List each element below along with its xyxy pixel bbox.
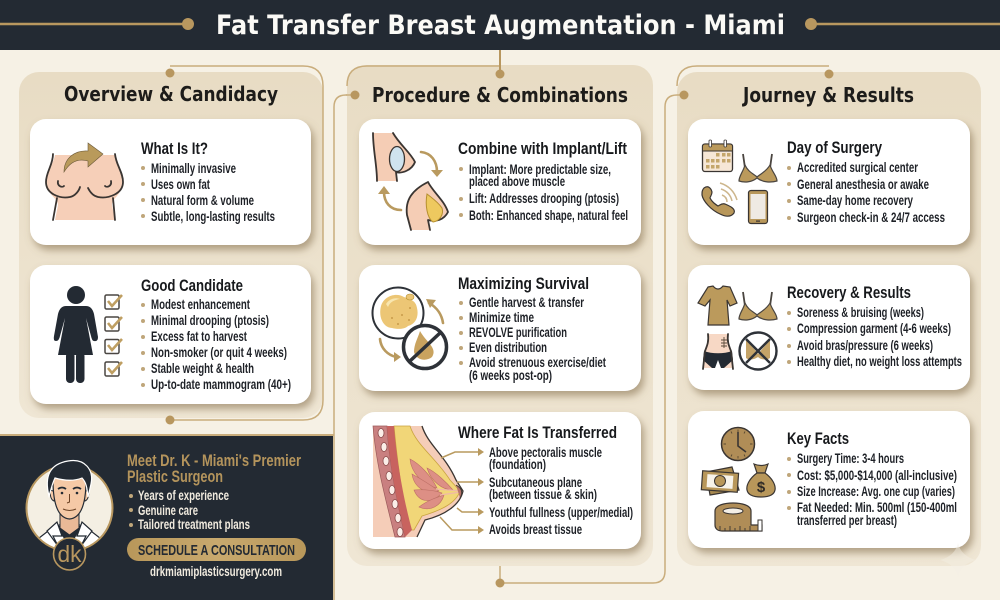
title: Fat Transfer Breast Augmentation - Miami: [216, 10, 785, 41]
website url: drkmiamiplasticsurgery.com: [150, 564, 282, 579]
text: recovery and results: Avoid bras/pressure (6 weeks): [797, 338, 933, 353]
panel: meet Dr. K: [0, 434, 334, 600]
text: combine with implant or lift: Implant: More predictable size,: [469, 162, 611, 177]
text: good candidate: Non-smoker (or quit 4 weeks): [151, 345, 287, 360]
text: good candidate: Up-to-date mammogram (40+): [151, 377, 291, 392]
icon: breast anatomy cross-section: [373, 426, 484, 537]
icon: calendar, bra, phone and mobile: [702, 140, 777, 224]
button: schedule a consultation: [127, 538, 306, 561]
text: maximizing survival: Maximizing Survival: [458, 274, 589, 293]
text: good candidate: Stable weight & health: [151, 361, 254, 376]
portrait: Dr. K: dk: [58, 541, 82, 567]
list: surgeon benefits: Genuine care: [138, 503, 198, 518]
text: what is it: Uses own fat: [151, 177, 210, 192]
card: what is it: [30, 119, 311, 245]
text: what is it: [141, 139, 275, 224]
text: combine with implant or lift: Combine with Implant/Lift: [458, 139, 627, 158]
heading: journey and results: Journey & Results: [741, 83, 914, 107]
text: maximizing survival: (6 weeks post-op): [469, 368, 552, 383]
text: day of surgery: Same-day home recovery: [797, 193, 913, 208]
heading: overview and candidacy: Overview & Candidacy: [64, 82, 278, 106]
icon: fat cell and prohibited drop: [372, 288, 446, 368]
text: key facts: transferred per breast): [797, 513, 897, 528]
icon: woman with checklist: [54, 286, 122, 383]
text: day of surgery: Accredited surgical center: [797, 160, 919, 175]
text: maximizing survival: REVOLVE purification: [469, 325, 567, 340]
text: good candidate: Minimal drooping (ptosis): [151, 313, 269, 328]
text: maximizing survival: Gentle harvest & transfer: [469, 295, 585, 310]
panel: overview and candidacy: [19, 66, 323, 424]
text: good candidate: Excess fat to harvest: [151, 329, 247, 344]
text: day of surgery: General anesthesia or awake: [797, 177, 929, 192]
card: maximizing survival: [359, 265, 641, 391]
card: combine with implant or lift: [359, 119, 641, 245]
text: where fat is transferred: Where Fat Is Transferred: [458, 423, 617, 442]
text: maximizing survival: Even distribution: [469, 340, 547, 355]
list: surgeon benefits: [129, 488, 250, 532]
text: recovery and results: Soreness & bruising (weeks): [797, 305, 924, 320]
text: day of surgery: [787, 138, 945, 225]
text: maximizing survival: [458, 274, 606, 383]
text: where fat is transferred: Youthful fullness (upper/medial): [489, 505, 633, 520]
connector lines: [334, 50, 684, 600]
text: combine with implant or lift: Both: Enhanced shape, natural feel: [469, 208, 628, 223]
text: where fat is transferred: (foundation): [489, 457, 546, 472]
icon: implant and lift profiles: [373, 133, 448, 230]
text: combine with implant or lift: placed above muscle: [469, 174, 565, 189]
text: maximizing survival: Avoid strenuous exercise/diet: [469, 355, 606, 370]
card: recovery and results: [688, 265, 970, 390]
panel: procedure and combinations: [346, 50, 653, 566]
header banner: [0, 0, 1000, 50]
card: good candidate: [30, 265, 311, 404]
text: good candidate: Modest enhancement: [151, 297, 250, 312]
text: day of surgery: Day of Surgery: [787, 138, 882, 157]
list: surgeon benefits: Years of experience: [138, 488, 229, 503]
text: good candidate: [141, 276, 291, 392]
text: recovery and results: Recovery & Results: [787, 283, 911, 302]
icon: garments, abdomen and no-bra sign: [698, 286, 777, 370]
text: what is it: Natural form & volume: [151, 193, 254, 208]
text: what is it: What Is It?: [141, 139, 208, 158]
text: day of surgery: Surgeon check-in & 24/7 access: [797, 210, 945, 225]
text: where fat is transferred: [458, 423, 633, 537]
icon: sparkle watermark: [940, 543, 976, 577]
icon: clock, money and measuring tape: $: [757, 479, 766, 496]
text: what is it: Minimally invasive: [151, 161, 236, 176]
card: key facts: [688, 411, 970, 548]
button: schedule a consultation: SCHEDULE A CONSULTATION: [138, 542, 295, 559]
text: maximizing survival: Minimize time: [469, 310, 534, 325]
text: surgeon heading: Meet Dr. K - Miami's Premier: [127, 452, 301, 470]
text: combine with implant or lift: [458, 139, 628, 223]
list: surgeon benefits: Tailored treatment plans: [138, 517, 250, 532]
portrait: Dr. K: [26, 461, 112, 570]
card: where fat is transferred: [359, 412, 641, 549]
text: key facts: Key Facts: [787, 429, 849, 448]
icon: clock, money and measuring tape: [701, 428, 775, 531]
text: combine with implant or lift: Lift: Addresses drooping (ptosis): [469, 191, 619, 206]
icon: breasts with arrow: [46, 143, 123, 220]
text: recovery and results: [787, 283, 962, 369]
text: key facts: Surgery Time: 3-4 hours: [797, 451, 904, 466]
text: where fat is transferred: Subcutaneous plane: [489, 475, 582, 490]
text: key facts: [787, 429, 957, 528]
panel: journey and results: [677, 66, 981, 566]
text: where fat is transferred: Avoids breast tissue: [489, 522, 582, 537]
heading: procedure and combinations: Procedure & Combinations: [372, 83, 628, 107]
text: where fat is transferred: Above pectoralis muscle: [489, 445, 602, 460]
text: good candidate: Good Candidate: [141, 276, 243, 295]
text: surgeon heading: [127, 452, 301, 486]
text: what is it: Subtle, long-lasting results: [151, 209, 275, 224]
text: where fat is transferred: (between tissue & skin): [489, 487, 597, 502]
text: surgeon heading: Plastic Surgeon: [127, 468, 223, 486]
card: day of surgery: [688, 119, 970, 245]
